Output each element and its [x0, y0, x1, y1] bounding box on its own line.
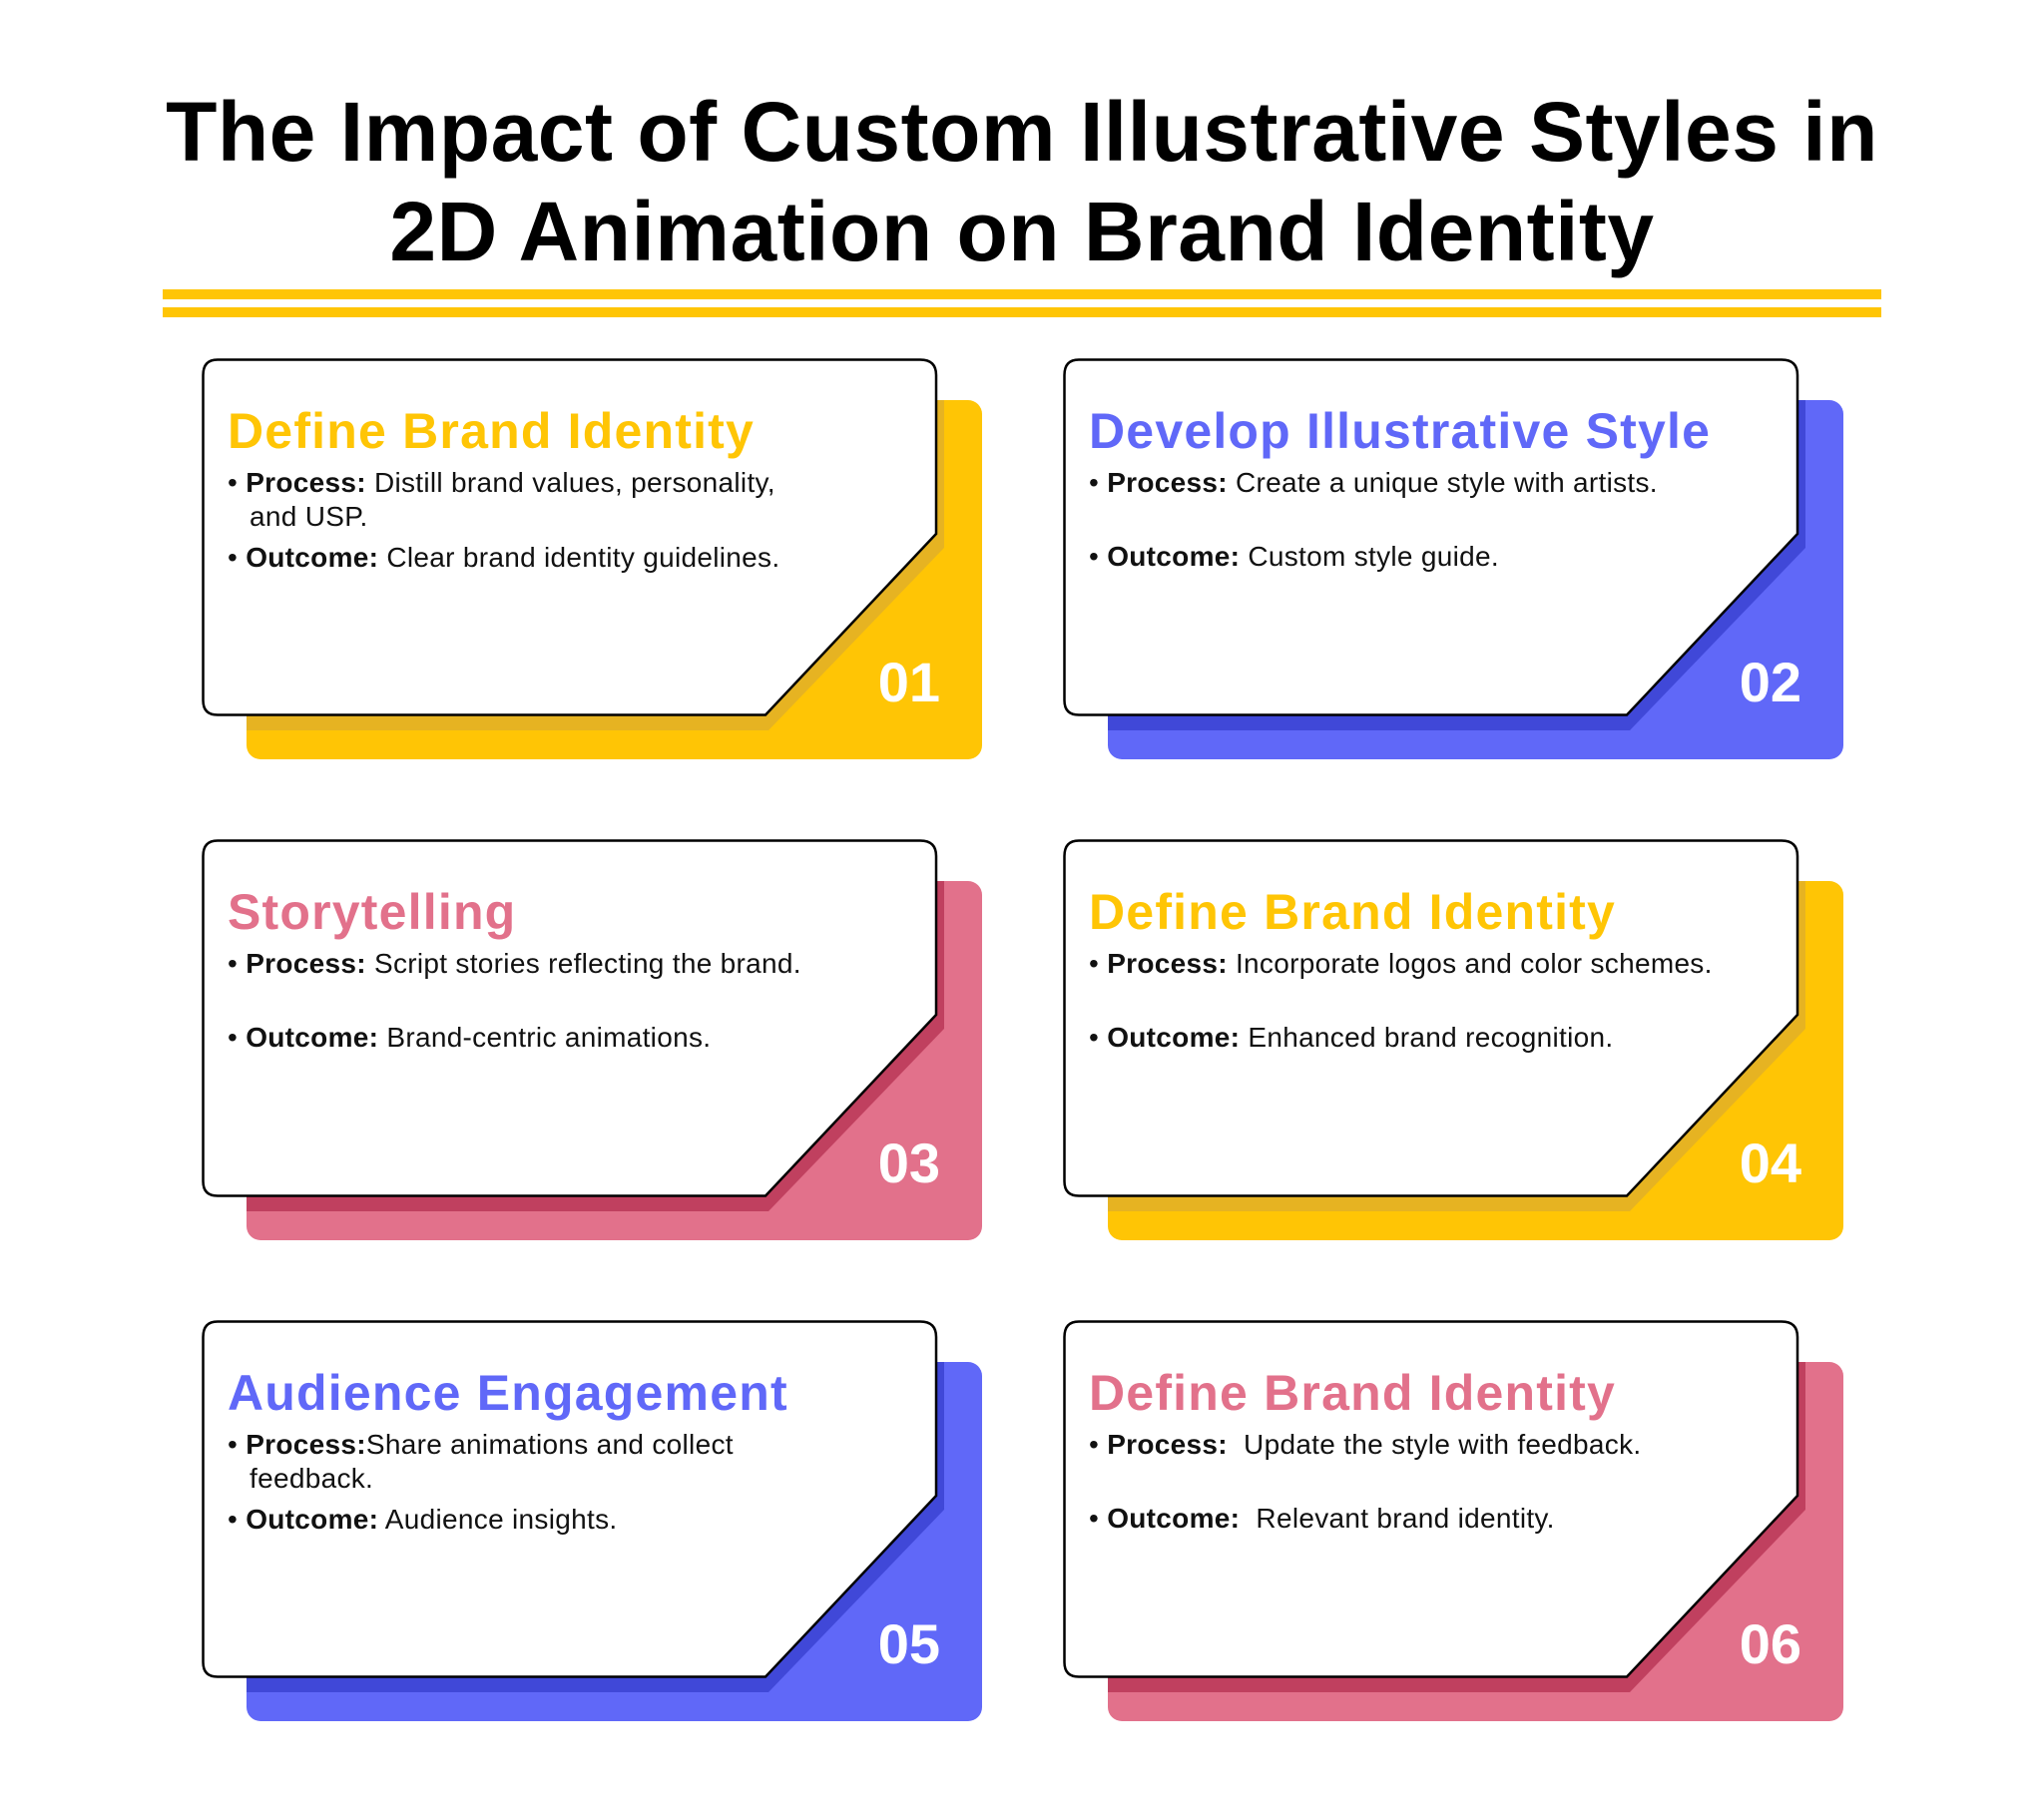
title: The Impact of Custom Illustrative Styles in [166, 85, 1878, 179]
card 01: Define Brand Identity [228, 403, 755, 459]
card 01 [202, 358, 982, 759]
card 01: • Outcome: Clear brand identity guidelines. [228, 542, 779, 573]
card 03: • Outcome: Brand-centric animations. [228, 1022, 711, 1053]
card 06: • Outcome: Relevant brand identity. [1089, 1503, 1555, 1534]
card 04 [1063, 839, 1843, 1240]
card 04: Define Brand Identity [1089, 884, 1616, 940]
card 03: • Process: Script stories reflecting the brand. [228, 948, 801, 979]
card 06: 06 [1740, 1612, 1801, 1675]
card 04: 04 [1740, 1131, 1801, 1194]
card 02: Develop Illustrative Style [1089, 403, 1711, 459]
title [166, 85, 1878, 278]
card 04: • Outcome: Enhanced brand recognition. [1089, 1022, 1613, 1053]
title: 2D Animation on Brand Identity [389, 185, 1655, 278]
card 04: • Process: Incorporate logos and color schemes. [1089, 948, 1713, 979]
card 02: 02 [1740, 651, 1801, 713]
card 03 [202, 839, 982, 1240]
card 01: • Process: Distill brand values, personality, and USP. [228, 467, 775, 532]
card 06: Define Brand Identity [1089, 1365, 1616, 1421]
card 03: Storytelling [228, 884, 516, 940]
card 02 [1063, 358, 1843, 759]
card 02: • Outcome: Custom style guide. [1089, 541, 1499, 572]
card 06 [1063, 1320, 1843, 1721]
card 05: 05 [878, 1612, 940, 1675]
card 05: • Outcome: Audience insights. [228, 1504, 617, 1535]
card 06: • Process: Update the style with feedback. [1089, 1429, 1641, 1460]
card 02: • Process: Create a unique style with artists. [1089, 467, 1658, 498]
card 05: • Process:Share animations and collect feedback. [228, 1429, 734, 1494]
card 03: 03 [878, 1131, 940, 1194]
card 05: Audience Engagement [228, 1365, 788, 1421]
card 01: 01 [878, 651, 940, 713]
card 05 [202, 1320, 982, 1721]
